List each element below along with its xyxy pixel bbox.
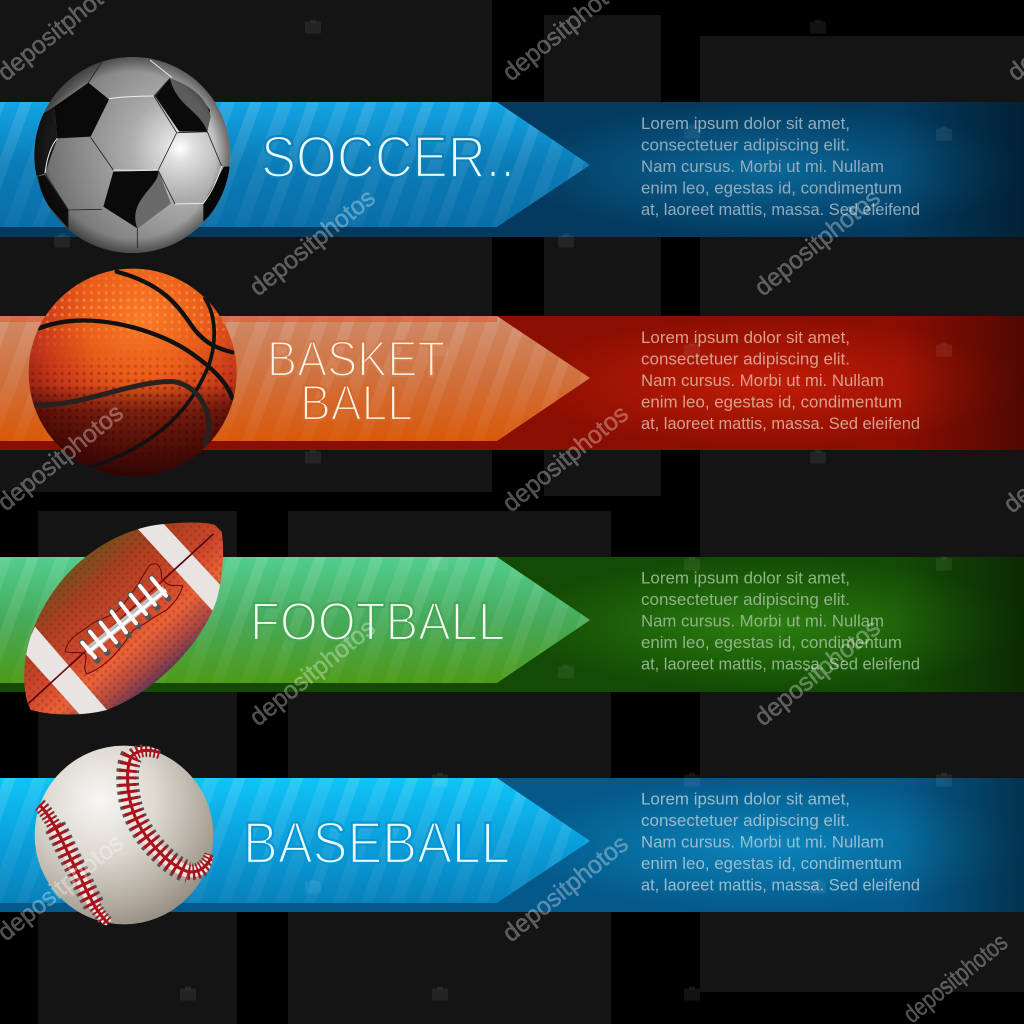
text block: soccer <box>641 115 920 219</box>
watermark: depositphotos text: depositphotos <box>497 830 634 948</box>
text block: soccer: consectetuer adipiscing elit. <box>641 136 850 154</box>
heading: soccer: SOCCER.. <box>261 125 515 190</box>
text block: soccer: Lorem ipsum dolor sit amet, <box>641 115 850 133</box>
heading: basketball: BALL <box>300 375 413 431</box>
text block: basketball: Lorem ipsum dolor sit amet, <box>641 329 850 347</box>
arrow: soccer <box>0 102 590 227</box>
text block: football: Lorem ipsum dolor sit amet, <box>641 570 850 588</box>
text block: baseball: at, laoreet mattis, massa. Sed eleifend <box>641 876 920 894</box>
icon: basketball <box>27 267 240 480</box>
text block: basketball: enim leo, egestas id, condimentum <box>641 394 902 412</box>
arrow: football <box>0 557 590 683</box>
watermark: depositphotos text: depositphotos <box>749 614 886 732</box>
text block: football: enim leo, egestas id, condimentum <box>641 634 902 652</box>
watermark: depositphotos text: depositphotos <box>749 184 886 302</box>
text block: baseball: consectetuer adipiscing elit. <box>641 812 850 830</box>
text block: soccer: Nam cursus. Morbi ut mi. Nullam <box>641 158 884 176</box>
text block: basketball <box>641 329 920 433</box>
text block: baseball <box>641 790 920 894</box>
heading: basketball <box>267 331 445 431</box>
text block: soccer: at, laoreet mattis, massa. Sed eleifend <box>641 201 920 219</box>
heading: football: FOOTBALL <box>250 592 505 652</box>
text block: football: Nam cursus. Morbi ut mi. Nullam <box>641 612 884 630</box>
panel: baseball band <box>0 778 1024 912</box>
text block: football: at, laoreet mattis, massa. Sed eleifend <box>641 656 920 674</box>
panel: football band <box>0 557 1024 692</box>
text block: soccer: enim leo, egestas id, condimentum <box>641 180 902 198</box>
text block: basketball: consectetuer adipiscing elit. <box>641 350 850 368</box>
icon: baseball <box>35 746 213 924</box>
icon: american football <box>24 522 224 714</box>
text block: baseball: enim leo, egestas id, condimentum <box>641 855 902 873</box>
heading: basketball: BASKET <box>267 331 445 387</box>
text block: football <box>641 570 920 674</box>
arrow: baseball <box>0 778 590 903</box>
panel: soccer band <box>0 102 1024 237</box>
watermark: depositphotos text: depositphotos <box>244 614 381 732</box>
arrow: basketball <box>0 316 590 441</box>
panel: basketball band <box>0 316 1024 450</box>
icon: soccer ball <box>33 57 233 253</box>
text block: baseball: Nam cursus. Morbi ut mi. Nullam <box>641 834 884 852</box>
text block: football: consectetuer adipiscing elit. <box>641 591 850 609</box>
text block: baseball: Lorem ipsum dolor sit amet, <box>641 790 850 808</box>
text block: basketball: at, laoreet mattis, massa. Sed eleifend <box>641 415 920 433</box>
heading: baseball: BASEBALL <box>243 811 510 876</box>
watermark: depositphotos text: depositphotos <box>497 400 634 518</box>
watermark: depositphotos text: depositphotos <box>244 184 381 302</box>
text block: basketball: Nam cursus. Morbi ut mi. Nullam <box>641 372 884 390</box>
